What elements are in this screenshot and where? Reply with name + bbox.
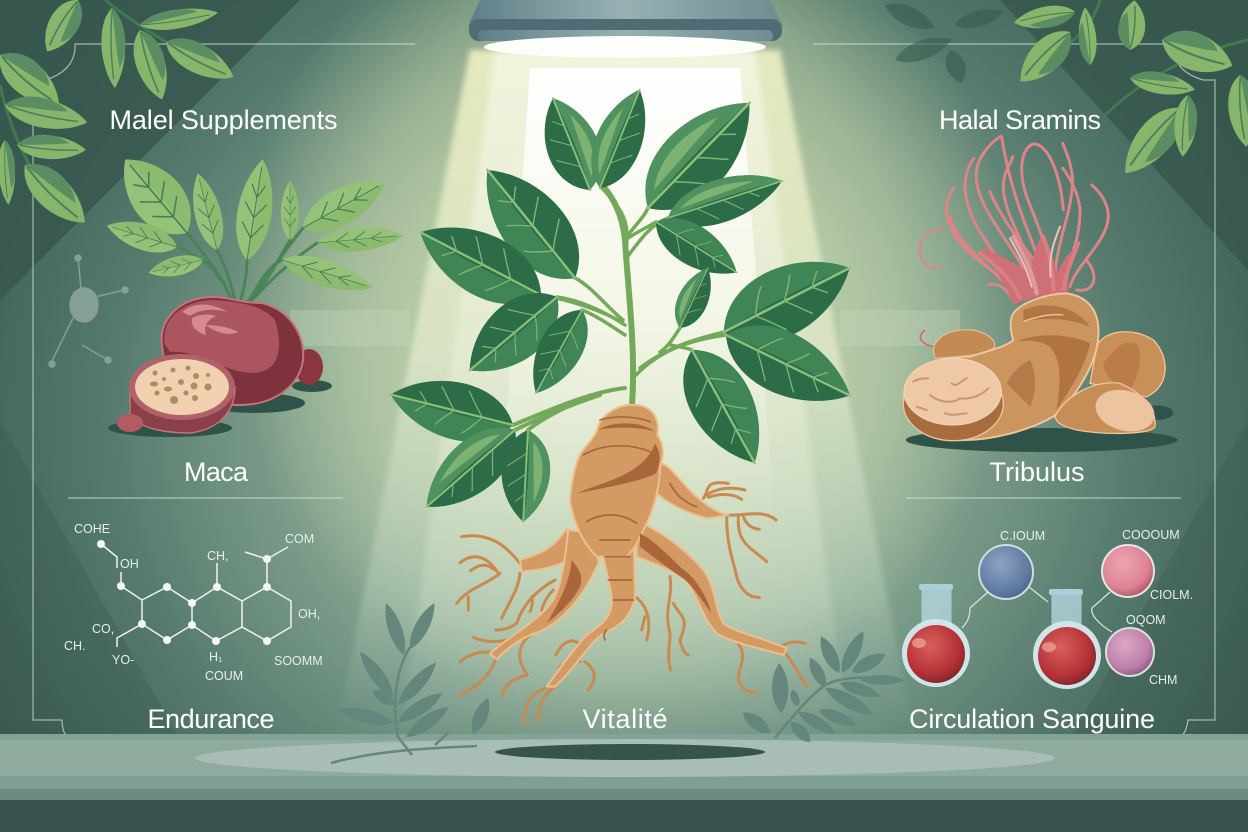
leaves <box>384 80 865 526</box>
diagram: flasks and spheres: C.IOUM <box>1000 529 1045 543</box>
diagram: molecule: OH, <box>298 607 320 621</box>
lamp <box>468 0 783 58</box>
decorative frame lines <box>33 44 1215 742</box>
diagram: molecule: CH, <box>207 549 229 563</box>
label: Circulation Sanguine: Circulation Sanguine <box>909 704 1155 734</box>
diagram: molecule: SOOMM <box>274 654 323 668</box>
diagram: molecule: COHE <box>74 522 110 536</box>
diagram: molecule <box>64 522 323 683</box>
tentacles <box>919 137 1108 305</box>
diagram: flasks and spheres: OQOM <box>1126 613 1166 627</box>
stems <box>513 187 726 430</box>
diagram: flasks and spheres: COOOUM <box>1122 528 1180 542</box>
diagram: flasks and spheres <box>902 528 1193 689</box>
diagram: molecule: COUM <box>205 669 243 683</box>
illustration: tribulus root <box>903 137 1178 452</box>
ginseng root <box>457 405 807 723</box>
heading: Halal Sramins: Halal Sramins <box>939 105 1101 135</box>
diagram: flasks and spheres: CHM <box>1149 673 1177 687</box>
label: Maca: Maca <box>184 457 249 487</box>
diagram: molecule: YO- <box>112 653 134 667</box>
diagram: molecule: CO, <box>92 622 114 636</box>
diagram: molecule: COM <box>285 532 314 546</box>
diagram: molecule: OH <box>120 557 139 571</box>
faded molecule <box>49 255 128 367</box>
top-right foliage <box>881 0 1248 184</box>
diagram: molecule: CH. <box>64 639 86 653</box>
heading: Malel Supplements: Malel Supplements <box>110 105 338 135</box>
illustration: maca root <box>103 143 405 437</box>
label: Endurance: Endurance <box>148 704 274 734</box>
central plant <box>384 80 865 723</box>
diagram: flasks and spheres: CIOLM. <box>1150 588 1193 602</box>
floor platform <box>0 734 1248 832</box>
label: Tribulus: Tribulus <box>990 457 1084 487</box>
bottom faded plants <box>331 600 905 763</box>
label: Vitalité: Vitalité <box>582 704 668 734</box>
diagram: molecule: H₁ <box>209 650 222 664</box>
top-left foliage <box>0 0 240 235</box>
